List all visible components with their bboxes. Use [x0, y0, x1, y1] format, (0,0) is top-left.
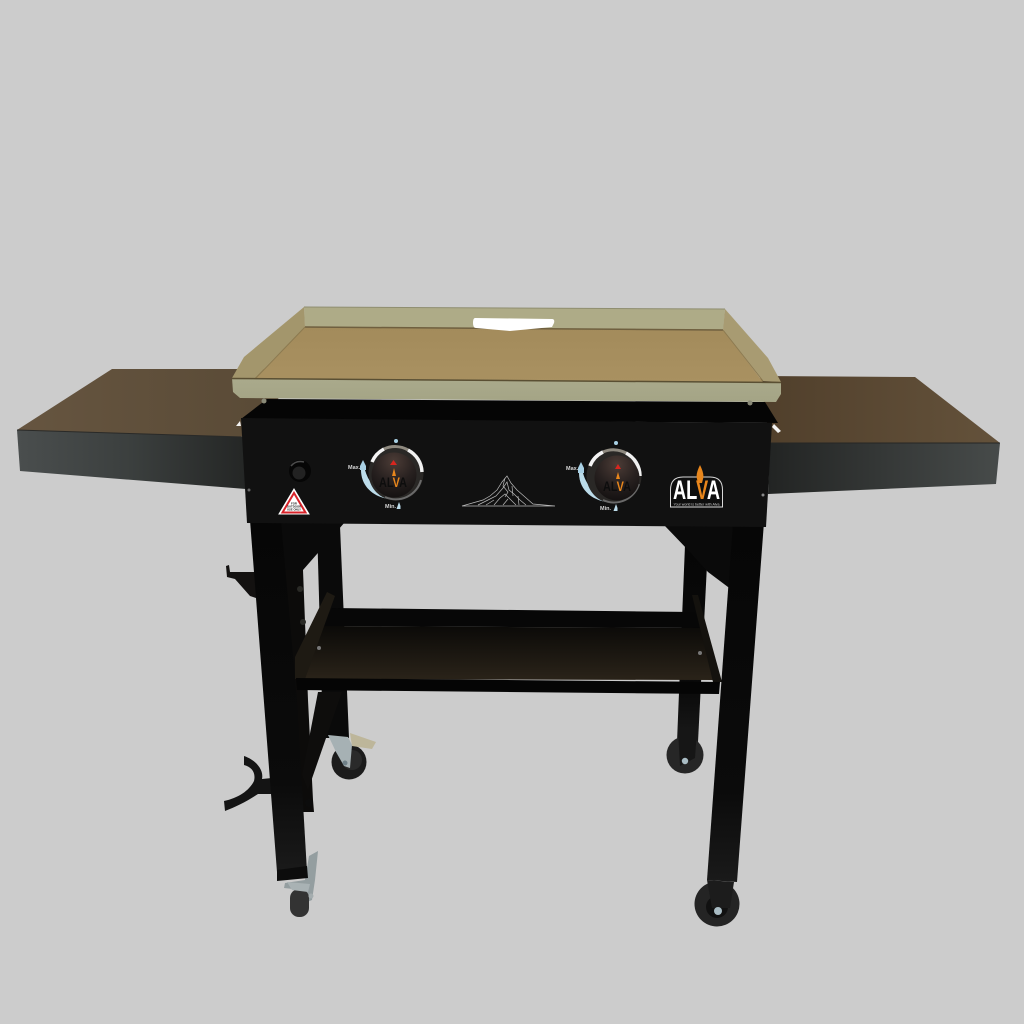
griddle cooktop: [232, 307, 781, 402]
front right leg: [694, 522, 764, 926]
upper hook: [226, 565, 256, 598]
dark gap under griddle: [236, 398, 781, 433]
right burner knob: ALVA: [603, 478, 631, 494]
left side wall: [295, 592, 335, 679]
back-left wheel: [328, 733, 376, 780]
mountain logo: [462, 476, 555, 506]
shelf front edge: [296, 678, 720, 694]
front right wheel: [694, 882, 740, 926]
glare on back wall: [473, 318, 554, 331]
right side shelf: [760, 376, 1000, 494]
min label: Min.: [600, 506, 611, 512]
left burner knob: [348, 439, 424, 510]
shelf front face: [17, 430, 246, 489]
ALVA brand logo: Your world is better with Alva: [674, 501, 720, 506]
warning sticker: OUTDOOR: [287, 504, 301, 508]
left burner knob: ALVA: [379, 474, 407, 490]
flame range arc: [361, 470, 394, 500]
shelf top: [17, 369, 300, 437]
right burner knob: [566, 441, 642, 512]
right inner wall: [723, 309, 781, 382]
back-right leg: [677, 545, 708, 742]
lower diagonal brace: [302, 692, 342, 790]
warning sticker: [279, 489, 309, 514]
back wall: [304, 307, 725, 332]
shelf front face: [768, 443, 1000, 494]
warning sticker: USE ONLY: [287, 508, 301, 512]
frame gussets and side rails: [280, 522, 734, 812]
back-right wheel: [666, 730, 704, 774]
right side wall: [692, 595, 722, 682]
shelf top: [760, 376, 1000, 443]
front lip: [232, 378, 781, 402]
knob body: [368, 446, 424, 500]
min label: Min.: [385, 504, 396, 510]
front left leg: [250, 520, 318, 917]
flame range arc: [579, 473, 612, 502]
shelf surface: [300, 626, 714, 680]
shelf back wall: [322, 608, 703, 628]
front left caster: [284, 851, 318, 917]
igniter button: [289, 460, 311, 482]
lower storage shelf: [295, 592, 722, 694]
back legs and casters: [317, 526, 708, 780]
ALVA brand logo: [670, 465, 722, 507]
max label: Max.: [348, 465, 361, 471]
left side handle hooks: [224, 565, 272, 811]
control panel: [241, 418, 772, 527]
max label: Max.: [566, 466, 579, 472]
left side rail: [285, 570, 314, 812]
warning sticker: FOR: [291, 502, 297, 506]
left inner wall: [232, 307, 305, 379]
knob body: [586, 448, 642, 504]
ALVA brand logo: ALVA: [673, 475, 720, 505]
cooking surface: [254, 327, 763, 382]
back-left leg: [317, 526, 349, 738]
left side shelf: [17, 369, 300, 489]
lower tool holder: [224, 756, 272, 811]
